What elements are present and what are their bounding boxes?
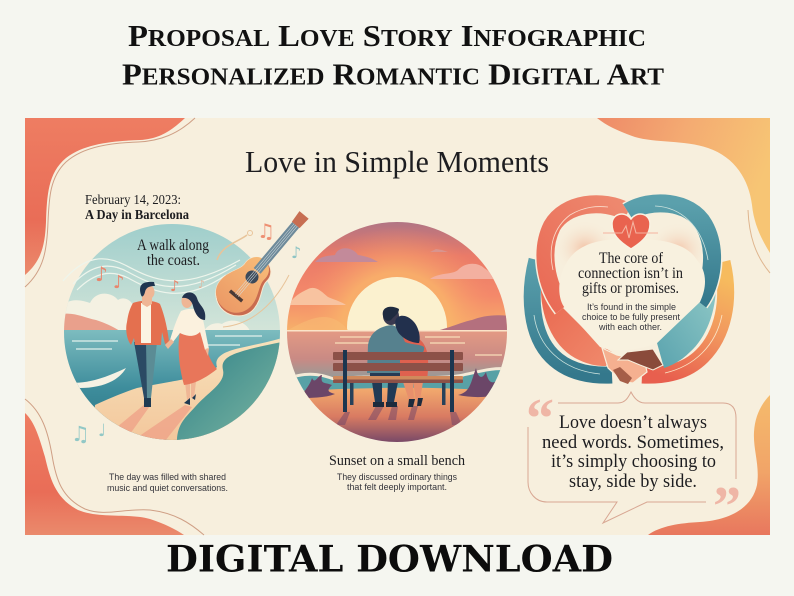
date heading: February 14, 2023:	[85, 192, 181, 207]
caption: A walk along	[137, 237, 209, 254]
sky	[285, 220, 510, 332]
icon: music notes teal: ♫	[71, 422, 90, 446]
notes: ♪	[170, 277, 180, 295]
title	[122, 18, 664, 92]
text block: The day was filled with shared	[109, 472, 226, 483]
caption line two: the coast.	[147, 252, 200, 269]
teal arm	[657, 285, 716, 368]
title: PERSONALIZED ROMANTIC DIGITAL ART	[122, 56, 664, 92]
text: core of connection: The core of	[599, 250, 664, 267]
quote mark close: ”	[713, 476, 741, 538]
beach path	[92, 338, 282, 441]
title: PROPOSAL LOVE STORY INFOGRAPHIC	[128, 18, 646, 53]
panel: infographic	[25, 118, 770, 538]
decorative corner: bottom left	[25, 399, 204, 535]
upper red loop	[545, 204, 628, 308]
red arm	[541, 285, 612, 366]
quote text: stay, side by side.	[569, 471, 697, 492]
sand	[304, 388, 490, 442]
bench	[333, 350, 463, 412]
decorative corner: top left	[25, 118, 195, 287]
horizon hills	[294, 317, 348, 330]
date heading: A Day in Barcelona	[85, 207, 189, 222]
notes	[95, 262, 205, 295]
quote text: Love doesn’t always	[559, 412, 707, 433]
quote text: need words. Sometimes,	[542, 432, 724, 453]
icon: music notes near guitar: ♪	[291, 243, 301, 262]
sun	[347, 277, 447, 330]
illustration: couple walking on the coast	[60, 201, 321, 494]
couple	[367, 307, 428, 407]
notes: ♪	[198, 278, 205, 291]
text block	[107, 472, 228, 494]
text: core of connection: connection isn’t in	[578, 265, 683, 282]
icon: music notes near guitar	[257, 219, 301, 262]
icon: heart with pulse	[603, 214, 658, 249]
icon: music notes near guitar: ♫	[257, 219, 275, 243]
handshake	[602, 348, 663, 384]
icon: music notes teal: ♩	[98, 421, 106, 441]
heading: Love in Simple Moments	[245, 144, 549, 179]
text: core of connection: gifts or promises.	[582, 280, 679, 297]
text block: They discussed ordinary things	[337, 472, 457, 483]
woman	[165, 292, 217, 405]
callout: speech bubble	[526, 388, 741, 538]
green dune	[177, 342, 282, 445]
illustration: sunset bench	[285, 220, 510, 493]
icon: guitar	[207, 201, 321, 327]
glow	[553, 220, 617, 276]
sea	[285, 331, 510, 393]
waves	[296, 367, 501, 391]
sea	[60, 330, 285, 445]
notes: ♪	[113, 272, 124, 293]
text block: that felt deeply important.	[347, 482, 447, 493]
text block: It’s found in the simple	[587, 302, 676, 313]
quote text	[542, 412, 724, 492]
quote text: it’s simply choosing to	[551, 451, 716, 472]
music staff	[63, 259, 240, 293]
cloud	[66, 294, 132, 330]
upper teal loop	[628, 203, 712, 302]
outer teal band	[532, 260, 612, 375]
plants	[304, 375, 335, 398]
text block: with each other.	[598, 322, 662, 333]
text block: choice to be fully present	[582, 312, 680, 323]
decorative corner: bottom right	[648, 395, 770, 535]
wave highlights	[72, 336, 262, 349]
clouds	[315, 248, 378, 262]
subheading: Sunset on a small bench	[329, 453, 466, 469]
notes: ♪	[95, 262, 108, 286]
illustration: intertwined arms and heart	[532, 203, 726, 384]
footer banner: DIGITAL DOWNLOAD	[166, 538, 613, 580]
date heading	[85, 192, 189, 222]
halo	[324, 237, 472, 324]
central blob	[559, 239, 705, 350]
text block	[582, 302, 680, 333]
quote mark open: “	[526, 388, 554, 450]
text: core of connection	[578, 250, 683, 297]
sky	[60, 220, 285, 332]
icon: music notes teal	[71, 421, 106, 446]
mountain	[64, 314, 118, 330]
man	[126, 282, 169, 407]
text block	[337, 472, 457, 493]
decorative corner: top right	[597, 118, 770, 273]
outer orange band	[642, 262, 726, 375]
sand streaks	[118, 405, 149, 432]
text block: music and quiet conversations.	[107, 483, 228, 494]
